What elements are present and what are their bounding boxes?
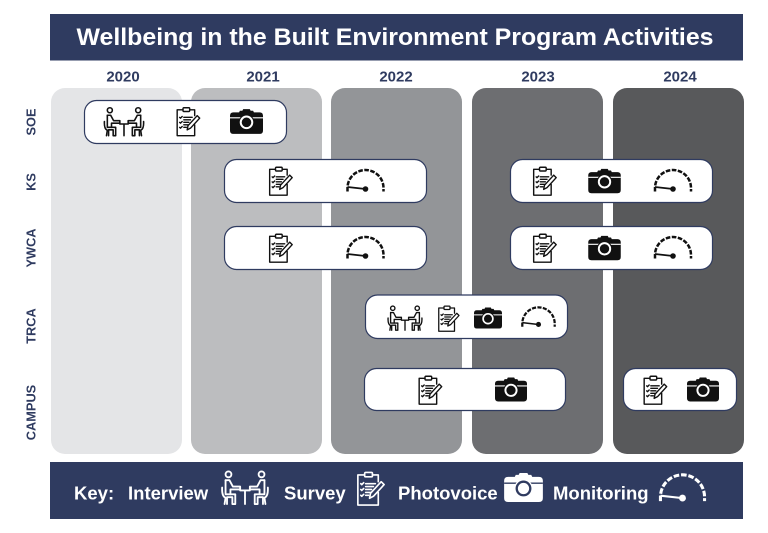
year headings: 2020	[106, 68, 140, 86]
row labels: KS	[24, 173, 38, 191]
title banner: Wellbeing in the Built Environment Program Activities	[76, 24, 714, 51]
row labels: SOE	[24, 108, 38, 136]
year headings	[106, 68, 697, 86]
row: YWCA 2021-2022	[224, 226, 426, 270]
key: interview	[128, 471, 268, 504]
key: monitoring	[553, 475, 705, 504]
key: survey	[284, 472, 384, 505]
year headings: 2022	[379, 68, 413, 86]
row: KS 2023-2024	[510, 160, 712, 202]
row labels: TRCA	[24, 308, 38, 344]
key: photovoice: Photovoice	[398, 482, 498, 504]
key: photovoice	[398, 473, 543, 504]
row: CAMPUS 2024	[624, 368, 736, 410]
key: survey: Survey	[284, 482, 346, 504]
year headings: 2024	[663, 68, 697, 86]
year columns	[51, 88, 744, 454]
key label: Key:	[74, 482, 114, 504]
row: KS 2021-2022	[224, 160, 426, 202]
row labels	[24, 108, 38, 440]
year headings: 2023	[521, 68, 555, 86]
row: TRCA 2022-2023	[366, 295, 568, 338]
key: monitoring: Monitoring	[553, 482, 649, 504]
row labels: CAMPUS	[24, 384, 38, 440]
row labels: YWCA	[24, 228, 38, 268]
year headings: 2021	[246, 68, 280, 86]
row: CAMPUS 2022-2023	[364, 368, 566, 410]
key: interview: Interview	[128, 482, 209, 504]
row: YWCA 2023-2024	[510, 226, 712, 270]
row: SOE 2020-2021	[84, 100, 286, 144]
key bar	[50, 462, 743, 519]
title banner	[50, 14, 743, 60]
